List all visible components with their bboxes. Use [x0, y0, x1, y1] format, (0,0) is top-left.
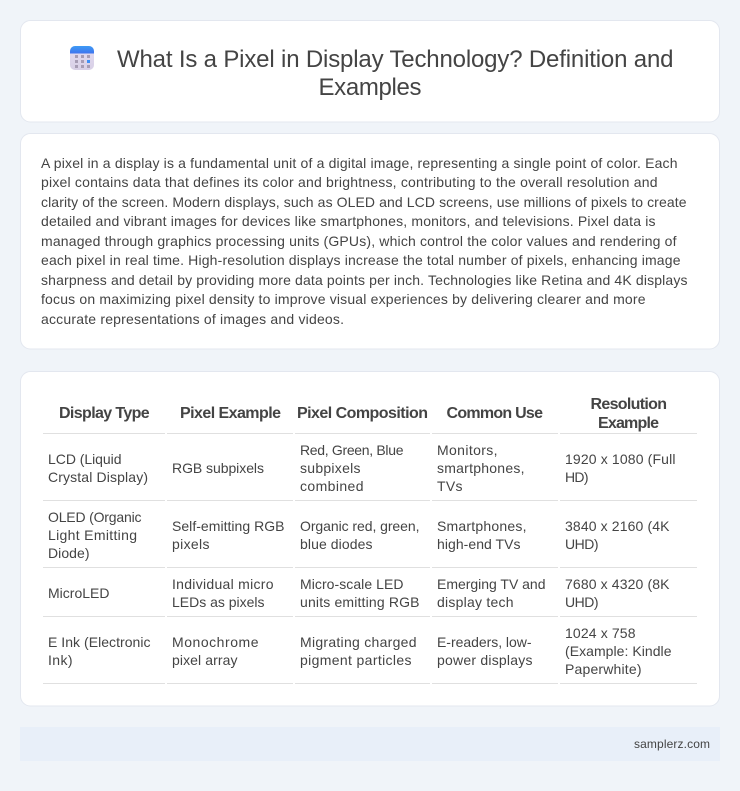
row: LCD: 1920 x 1080 (Full — [565, 451, 676, 467]
row: OLED: OLED (Organic — [48, 509, 142, 525]
row: OLED: UHD) — [565, 536, 598, 552]
row: E Ink: Migrating charged — [300, 634, 416, 650]
table header — [59, 396, 667, 432]
table header: Resolution — [590, 396, 667, 413]
row: LCD: Crystal Display) — [48, 469, 148, 485]
table — [43, 396, 697, 684]
row: MicroLED: units emitting RGB — [300, 594, 420, 610]
text block: definition: accurate representations of images and videos. — [41, 311, 344, 327]
row: OLED: Self-emitting RGB — [172, 518, 284, 534]
row: OLED: Organic red, green, — [300, 518, 420, 534]
row: E Ink: 1024 x 758 — [565, 625, 636, 641]
footer bar — [20, 727, 720, 761]
row: MicroLED: LEDs as pixels — [172, 594, 264, 610]
title card — [20, 20, 720, 122]
row: OLED — [48, 509, 670, 561]
row: LCD: smartphones, — [437, 460, 524, 476]
row: MicroLED: Micro-scale LED — [300, 576, 404, 592]
row: OLED: Smartphones, — [437, 518, 526, 534]
row: LCD: HD) — [565, 469, 588, 485]
row: LCD: LCD (Liquid — [48, 451, 122, 467]
panel: display table — [20, 372, 720, 706]
row: MicroLED: UHD) — [565, 594, 598, 610]
row: E Ink: Paperwhite) — [565, 661, 642, 677]
text block: definition: clarity of the screen. Modern displays, such as OLED and LCD screens, use millions of pixels to create — [41, 194, 687, 210]
text block: definition: each pixel in real time. High-resolution displays increase the total number of pixels, enhancing image — [41, 252, 681, 268]
table header: Display Type — [59, 405, 150, 422]
row: LCD: subpixels — [300, 460, 360, 476]
row: LCD: TVs — [437, 478, 462, 494]
row: LCD — [48, 442, 676, 494]
row: MicroLED — [48, 576, 670, 610]
row: MicroLED: display tech — [437, 594, 514, 610]
row: E Ink: E Ink (Electronic — [48, 634, 150, 650]
row: LCD: RGB subpixels — [172, 460, 264, 476]
row: E Ink: Monochrome — [172, 634, 259, 650]
row: LCD: Red, Green, Blue — [300, 442, 404, 458]
row: OLED: Light Emitting — [48, 527, 137, 543]
row: E Ink: (Example: Kindle — [565, 643, 672, 659]
text block: definition — [41, 155, 688, 327]
row: MicroLED: 7680 x 4320 (8K — [565, 576, 670, 592]
row: MicroLED: Emerging TV and — [437, 576, 546, 592]
title — [117, 46, 674, 101]
title: What Is a Pixel in Display Technology? Definition and — [117, 46, 674, 73]
text block: definition: detailed and vibrant images for devices like smartphones, monitors, and televisions. Pixel data is — [41, 213, 656, 229]
row: MicroLED: MicroLED — [48, 585, 110, 601]
table header: Example — [598, 415, 659, 432]
row: OLED: pixels — [172, 536, 210, 552]
table header: Pixel Example — [180, 405, 281, 422]
row: E Ink: Ink) — [48, 652, 72, 668]
icon: pixel grid — [70, 46, 94, 70]
footer source: samplerz.com — [634, 737, 710, 751]
row: E Ink: pigment particles — [300, 652, 412, 668]
table header: Common Use — [446, 405, 543, 422]
row: OLED: high-end TVs — [437, 536, 520, 552]
table header: Pixel Composition — [297, 405, 428, 422]
title: Examples — [318, 74, 422, 101]
row: E Ink — [48, 625, 672, 677]
row: OLED: blue diodes — [300, 536, 372, 552]
text block: definition: A pixel in a display is a fundamental unit of a digital image, representing a single point of color. Each — [41, 155, 678, 171]
row: E Ink: pixel array — [172, 652, 238, 668]
text block: definition: pixel contains data that defines its color and brightness, contributing to the overall resolution and — [41, 174, 658, 190]
row: E Ink: power displays — [437, 652, 532, 668]
row: OLED: Diode) — [48, 545, 90, 561]
text block: definition: focus on maximizing pixel density to improve visual experiences by delivering clearer and more — [41, 291, 646, 307]
text block: definition: managed through graphics processing units (GPUs), which control the color values and rendering of — [41, 233, 677, 249]
row: MicroLED: Individual micro — [172, 576, 274, 592]
row: E Ink: E-readers, low- — [437, 634, 532, 650]
panel: definition paragraph — [20, 134, 720, 349]
row: LCD: Monitors, — [437, 442, 498, 458]
row: OLED: 3840 x 2160 (4K — [565, 518, 670, 534]
text block: definition: sharpness and detail by providing more data points per inch. Technologies like Retina and 4K displays — [41, 272, 688, 288]
row: LCD: combined — [300, 478, 364, 494]
